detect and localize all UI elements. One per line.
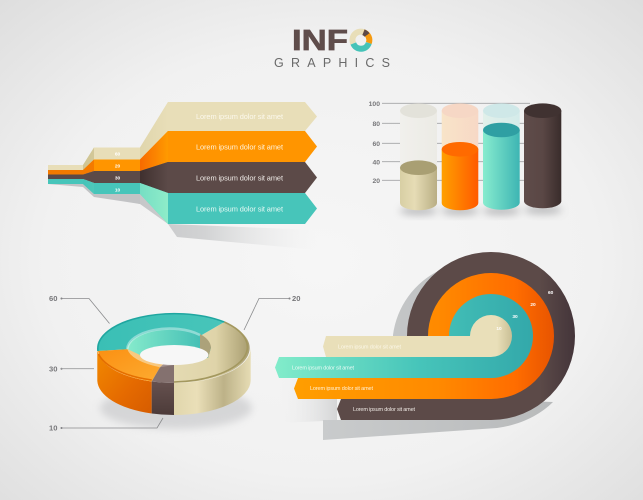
leader line: 60 bbox=[49, 294, 110, 324]
title bbox=[274, 25, 390, 70]
value: 30 bbox=[115, 175, 120, 181]
band: cream bbox=[48, 102, 317, 170]
y axis labels: 40 bbox=[372, 160, 380, 166]
ribbon: orange bbox=[294, 273, 554, 399]
bar: 60 bbox=[442, 103, 478, 210]
ribbon: teal bbox=[275, 294, 533, 378]
spiral drop shadow bbox=[323, 270, 553, 440]
value: 30 bbox=[512, 314, 518, 320]
title word INF: INF bbox=[292, 25, 348, 57]
donut top: brown segment bbox=[152, 360, 174, 383]
ribbon: cream bbox=[323, 315, 512, 357]
y axis labels: 20 bbox=[372, 178, 380, 185]
donut side: beige bbox=[174, 348, 251, 415]
ribbon: brown bbox=[337, 252, 575, 420]
panel: funnel chart bbox=[48, 102, 317, 250]
bar: 100 bbox=[524, 103, 561, 208]
panel: cylinder bar chart bbox=[369, 101, 562, 215]
leader line: 30 bbox=[49, 364, 94, 374]
subtitle: GRAPHICS bbox=[274, 56, 390, 70]
label: Lorem ipsum dolor sit amet bbox=[310, 386, 373, 392]
donut inner wall beige part bbox=[200, 334, 211, 358]
band: teal bbox=[48, 179, 317, 224]
donut shadow bbox=[100, 387, 252, 429]
y axis labels: 100 bbox=[369, 101, 380, 108]
label: Lorem ipsum dolor sit amet bbox=[196, 204, 283, 214]
donut top: orange segment bbox=[98, 349, 160, 382]
donut top: beige segment bbox=[174, 322, 250, 383]
bar: 40 bbox=[400, 103, 437, 210]
leader line: 20 bbox=[244, 294, 300, 330]
donut top: teal segment bbox=[98, 314, 224, 351]
value: 60 bbox=[115, 151, 120, 157]
leader line: 20: 20 bbox=[292, 294, 300, 303]
label: Lorem ipsum dolor sit amet bbox=[196, 142, 283, 152]
donut side: brown bbox=[152, 382, 174, 415]
leader line: 10 bbox=[49, 418, 163, 432]
leader line: 10: 10 bbox=[49, 424, 57, 432]
label: Lorem ipsum dolor sit amet bbox=[338, 344, 401, 350]
y axis labels: 80 bbox=[372, 121, 380, 128]
panel: 3D donut chart bbox=[49, 294, 300, 432]
donut inner wall bbox=[127, 330, 211, 358]
funnel shadow bbox=[94, 194, 317, 250]
donut side: orange bbox=[97, 348, 152, 414]
value: 60 bbox=[548, 290, 554, 296]
bar: 80 bbox=[483, 103, 520, 210]
value: 20 bbox=[530, 302, 536, 308]
panel: spiral ribbon chart bbox=[275, 252, 575, 440]
label: Lorem ipsum dolor sit amet bbox=[196, 112, 283, 121]
spiral left shadow bbox=[278, 379, 337, 423]
cylinder shadows bbox=[400, 206, 562, 215]
band: orange bbox=[48, 131, 317, 174]
band: brown bbox=[48, 162, 317, 193]
label: Lorem ipsum dolor sit amet bbox=[353, 407, 415, 413]
label: Lorem ipsum dolor sit amet bbox=[292, 366, 354, 372]
value: 10 bbox=[496, 326, 502, 332]
label: Lorem ipsum dolor sit amet bbox=[196, 174, 283, 182]
y axis labels bbox=[369, 101, 380, 185]
funnel stub shadow bbox=[48, 184, 140, 204]
donut rim bbox=[98, 314, 247, 382]
icon: donut letter O bbox=[352, 32, 369, 49]
value: 20 bbox=[115, 163, 120, 169]
value: 10 bbox=[115, 187, 120, 193]
y axis labels: 60 bbox=[372, 141, 380, 148]
leader line: 60: 60 bbox=[49, 294, 57, 303]
leader line: 30: 30 bbox=[49, 364, 57, 374]
donut pale lip bbox=[127, 329, 200, 367]
donut hole bbox=[140, 345, 208, 365]
